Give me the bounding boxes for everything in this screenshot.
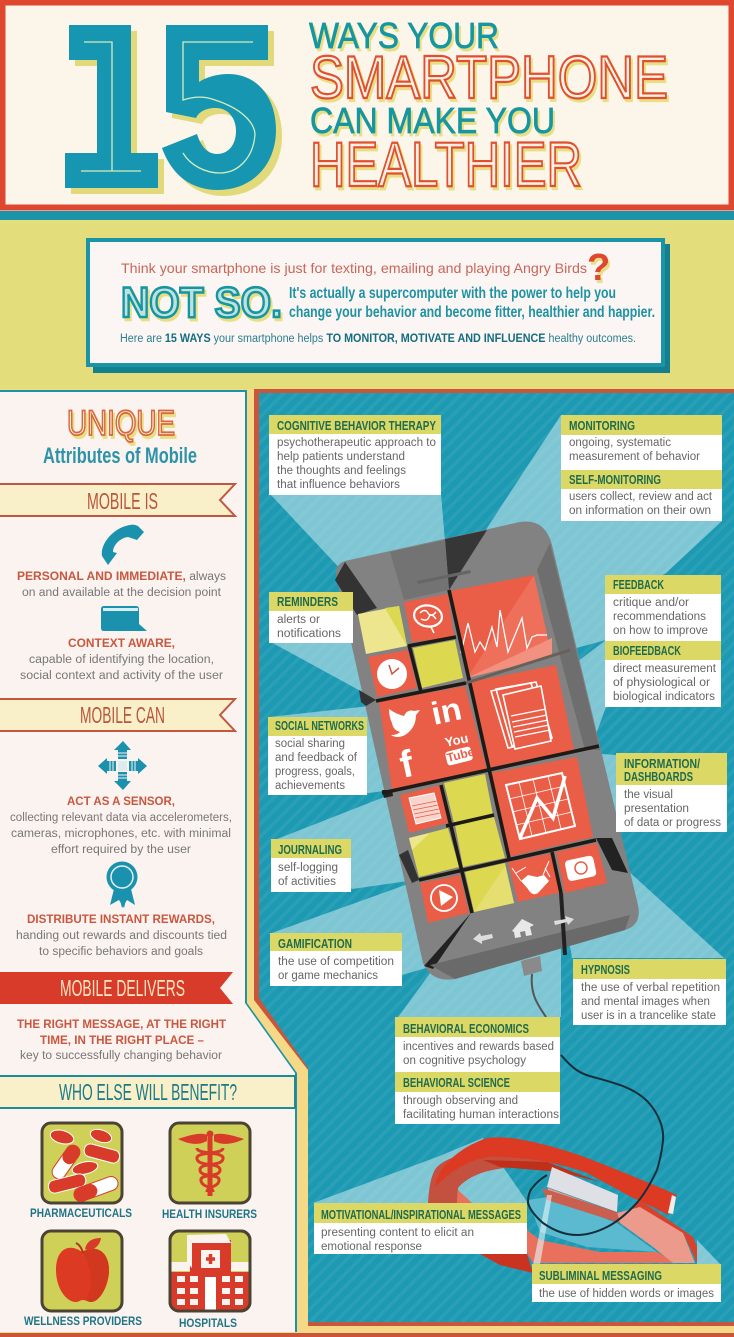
label: reminders: REMINDERS xyxy=(277,594,338,609)
ribbon: mobile is: MOBILE IS xyxy=(87,488,158,514)
label: feedback and biofeedback: biological indicators xyxy=(613,691,715,703)
text: distribute rewards: to specific behaviors and goals xyxy=(39,946,203,958)
icon: award ribbon xyxy=(106,862,138,908)
text: right message: key to successfully changing behavior xyxy=(20,1050,222,1062)
label: reminders: alerts or xyxy=(277,614,320,626)
label: cognitive behavior therapy: psychotherapeutic approach to xyxy=(277,437,436,449)
tile: social networks: in xyxy=(428,690,465,732)
label: gamification xyxy=(270,933,402,986)
label: monitoring and self-monitoring: SELF-MONITORING xyxy=(569,472,661,487)
label: gamification: the use of competition xyxy=(278,956,394,968)
ray: subliminal messaging xyxy=(533,1195,721,1265)
ribbon: mobile delivers: MOBILE DELIVERS xyxy=(60,975,185,1001)
icon: speech bubble xyxy=(101,606,147,631)
band hole highlight xyxy=(528,1197,657,1252)
label: journaling xyxy=(271,839,351,892)
band top face xyxy=(435,1137,677,1215)
label: reminders: notifications xyxy=(277,628,341,640)
label: feedback and biofeedback: FEEDBACK xyxy=(613,577,664,592)
label: reminders xyxy=(269,592,353,643)
speaker xyxy=(417,570,471,584)
tile: camera xyxy=(556,843,607,893)
text: personal and immediate: PERSONAL AND IMMEDIATE, always xyxy=(17,571,226,583)
tile: play xyxy=(420,875,469,923)
label: gamification: or game mechanics xyxy=(278,970,378,982)
ray: motivational messages xyxy=(313,1138,528,1203)
icon: question mark: ? xyxy=(587,247,610,289)
fitness wristband xyxy=(428,1137,697,1273)
panel: unique attributes xyxy=(0,392,295,1332)
tile: chart xyxy=(490,757,593,857)
title text: WAYS YOUR xyxy=(309,15,499,56)
band pale inner xyxy=(457,1190,472,1203)
smartphone xyxy=(335,521,639,980)
label: hypnosis: the use of verbal repetition xyxy=(581,982,720,994)
tile: social networks xyxy=(379,686,487,790)
label: monitoring and self-monitoring xyxy=(561,415,722,521)
label: health insurers: HEALTH INSURERS xyxy=(162,1209,257,1221)
text: right message: TIME, IN THE RIGHT PLACE – xyxy=(40,1035,205,1047)
label: monitoring and self-monitoring: users collect, review and act xyxy=(569,491,713,503)
title text xyxy=(309,15,668,200)
label: information dashboards: DASHBOARDS xyxy=(624,769,693,784)
label: motivational messages: MOTIVATIONAL/INSPIRATIONAL MESSAGES xyxy=(321,1207,521,1222)
label: social networks: SOCIAL NETWORKS xyxy=(275,718,364,733)
label: cognitive behavior therapy: COGNITIVE BEHAVIOR THERAPY xyxy=(277,418,436,433)
label: feedback and biofeedback: direct measurement xyxy=(613,663,717,675)
band pale strip xyxy=(547,1188,695,1263)
band end cap xyxy=(668,1195,676,1214)
label: social networks: achievements xyxy=(275,780,345,792)
tile: social networks: f xyxy=(396,743,418,787)
label: hypnosis xyxy=(573,959,726,1025)
label: cognitive behavior therapy: that influence behaviors xyxy=(277,479,400,491)
label: wellness providers: WELLNESS PROVIDERS xyxy=(24,1316,142,1328)
label: behavioral economics and science: BEHAVIORAL ECONOMICS xyxy=(403,1021,529,1036)
icon: forward arrow xyxy=(554,916,574,925)
text: right message xyxy=(17,1019,226,1062)
tile: yellow xyxy=(413,640,463,688)
sensor side xyxy=(542,1188,620,1223)
intro question: Think your smartphone is just for texting, emailing and playing Angry Birds xyxy=(121,260,587,276)
tile: brain xyxy=(404,594,454,642)
label: social networks: social sharing xyxy=(275,738,345,750)
label: journaling: self-logging xyxy=(278,862,338,874)
text: context aware: social context and activity of the user xyxy=(20,670,223,682)
label: monitoring and self-monitoring: MONITORING xyxy=(569,418,635,433)
header panel xyxy=(2,2,732,208)
text: personal and immediate: on and available at the decision point xyxy=(22,587,222,599)
label: subliminal messaging xyxy=(532,1264,721,1302)
icon: home xyxy=(512,919,534,938)
title text: HEALTHIER xyxy=(310,130,582,200)
text: act as a sensor: effort required by the user xyxy=(51,844,191,856)
band shadow xyxy=(483,1160,600,1182)
heading: unique: UNIQUE xyxy=(67,404,175,443)
label: journaling: of activities xyxy=(278,876,336,888)
intro statement xyxy=(289,285,655,321)
tile: handshake xyxy=(508,853,562,902)
text: act as a sensor: cameras, microphones, etc. with minimal xyxy=(11,828,231,840)
label: cognitive behavior therapy: help patients understand xyxy=(277,451,405,463)
label: monitoring and self-monitoring: on information on their own xyxy=(569,505,711,517)
label: pharmaceuticals: PHARMACEUTICALS xyxy=(30,1208,132,1220)
panel: phone and techniques xyxy=(259,393,734,1322)
text: distribute rewards xyxy=(16,914,227,958)
text: right message: THE RIGHT MESSAGE, AT THE RIGHT xyxy=(17,1019,226,1031)
label: journaling: JOURNALING xyxy=(278,842,342,857)
title text: SMARTPHONE xyxy=(310,44,668,111)
screen grid lines xyxy=(376,590,599,913)
label: cognitive behavior therapy: the thoughts and feelings xyxy=(277,465,406,477)
dark cable loop xyxy=(528,1055,663,1235)
phone body xyxy=(336,521,639,980)
label: feedback and biofeedback: critique and/or xyxy=(613,597,689,609)
label: behavioral economics and science: incentives and rewards based xyxy=(403,1041,554,1053)
icon: back arrow xyxy=(473,933,493,944)
text: context aware: CONTEXT AWARE, xyxy=(68,638,175,650)
text: distribute rewards: DISTRIBUTE INSTANT REWARDS, xyxy=(27,914,215,926)
label: information dashboards: of data or progress xyxy=(624,817,721,829)
label: feedback and biofeedback: on how to improve xyxy=(613,625,708,637)
label: information dashboards xyxy=(616,753,727,832)
band bottom inner xyxy=(527,1230,677,1263)
heading band: who else will benefit xyxy=(0,1076,295,1108)
tile: documents xyxy=(470,665,574,768)
label: gamification: GAMIFICATION xyxy=(278,936,352,951)
ribbon: mobile delivers xyxy=(0,972,233,1004)
intro box xyxy=(88,240,670,373)
tile: yellow grid xyxy=(409,774,514,912)
label: social networks: progress, goals, xyxy=(275,766,355,778)
big number 15 xyxy=(65,25,276,190)
tile: social networks: Tube xyxy=(445,745,476,765)
icon: telephone xyxy=(102,525,144,565)
label: information dashboards: the visual xyxy=(624,789,673,801)
label: monitoring and self-monitoring: ongoing, systematic xyxy=(569,437,671,449)
label: feedback and biofeedback: BIOFEEDBACK xyxy=(613,643,681,658)
text: act as a sensor: collecting relevant data via accelerometers, xyxy=(10,812,232,824)
label: hypnosis: and mental images when xyxy=(581,996,710,1008)
frame stripes between panels xyxy=(0,389,734,1337)
label: behavioral economics and science: BEHAVIORAL SCIENCE xyxy=(403,1075,510,1090)
sensor button xyxy=(547,1167,618,1212)
text: distribute rewards: handing out rewards and discounts tied xyxy=(16,930,227,942)
label: subliminal messaging: the use of hidden words or images xyxy=(539,1288,714,1300)
label: hospitals: HOSPITALS xyxy=(179,1318,237,1330)
label: hypnosis: HYPNOSIS xyxy=(581,962,630,977)
icon: wellness providers xyxy=(42,1231,122,1311)
tile: reminder note xyxy=(358,606,407,654)
label: monitoring and self-monitoring: measurement of behavior xyxy=(569,451,700,463)
heading band: who else will benefit: WHO ELSE WILL BENEFIT? xyxy=(59,1079,237,1105)
tile: social networks: You xyxy=(444,730,470,750)
ribbon: mobile can: MOBILE CAN xyxy=(80,702,165,728)
label: motivational messages: emotional response xyxy=(321,1241,422,1253)
tile: clock xyxy=(368,650,417,697)
label: feedback and biofeedback: recommendations xyxy=(613,611,706,623)
band right side xyxy=(633,1200,697,1263)
label: information dashboards: INFORMATION/ xyxy=(624,756,700,771)
label: feedback and biofeedback: of physiological or xyxy=(613,677,710,689)
label: subliminal messaging: SUBLIMINAL MESSAGING xyxy=(539,1268,662,1283)
icon: sensor arrows xyxy=(98,741,147,790)
label: social networks: and feedback of xyxy=(275,752,358,764)
icon: pharmaceuticals xyxy=(42,1123,122,1203)
label: behavioral economics and science: facilitating human interactions xyxy=(403,1109,559,1121)
cable xyxy=(521,956,546,1017)
NOT SO heading: NOT SO. xyxy=(121,279,282,327)
label: information dashboards: presentation xyxy=(624,803,689,815)
light rays xyxy=(269,415,724,1020)
intro summary: Here are 15 WAYS your smartphone helps TO MONITOR, MOTIVATE AND INFLUENCE healthy outcomes. xyxy=(120,333,636,345)
text: context aware: capable of identifying the location, xyxy=(29,654,214,666)
icon: hospitals xyxy=(170,1231,250,1312)
label: hypnosis: user is in a trancelike state xyxy=(581,1010,716,1022)
band inner wall xyxy=(428,1154,547,1203)
heading: attributes of mobile: Attributes of Mobile xyxy=(43,443,197,468)
ribbon: mobile can xyxy=(0,699,235,731)
tile: journal xyxy=(400,785,448,833)
intro statement: It's actually a supercomputer with the power to help you xyxy=(289,285,616,302)
yellow intro band xyxy=(0,220,734,389)
text: personal and immediate xyxy=(17,571,226,599)
label: motivational messages xyxy=(314,1203,527,1254)
label: feedback and biofeedback xyxy=(605,575,721,707)
icon: health insurers xyxy=(170,1123,250,1203)
text: context aware xyxy=(20,638,223,682)
label: cognitive behavior therapy xyxy=(269,415,441,495)
ribbon: mobile is xyxy=(0,484,235,516)
text: act as a sensor xyxy=(10,796,232,856)
label: behavioral economics and science xyxy=(395,1017,560,1124)
teal band xyxy=(0,211,734,220)
title text: CAN MAKE YOU xyxy=(310,100,555,141)
label: behavioral economics and science: through observing and xyxy=(403,1095,518,1107)
band lower edge xyxy=(480,1254,533,1273)
text: act as a sensor: ACT AS A SENSOR, xyxy=(67,796,175,808)
label: social networks xyxy=(268,717,367,795)
label: motivational messages: presenting content to elicit an xyxy=(321,1227,474,1239)
tile: heart monitor xyxy=(449,575,552,678)
label: behavioral economics and science: on cognitive psychology xyxy=(403,1055,526,1067)
